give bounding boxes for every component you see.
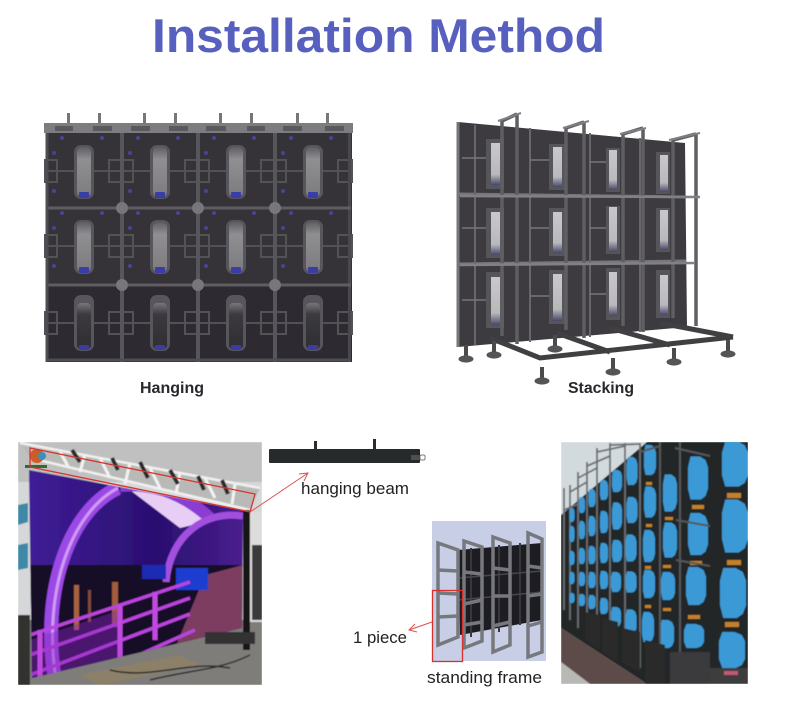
panel: hanging LED cabinet wall (44, 113, 353, 362)
panel: stacking LED wall with frames (458, 113, 736, 385)
arrow: 1 piece callout (409, 622, 432, 632)
label: 1 piece: 1 piece (353, 628, 407, 647)
label: stacking: Stacking (568, 380, 634, 397)
highlight: red outline around hanging beam (30, 448, 255, 512)
photo: hanging LED screen on truss (18, 442, 262, 690)
highlight: red box around 1 piece (432, 590, 462, 662)
icon: logo on photo (25, 449, 47, 468)
label: standing frame: standing frame (427, 668, 542, 687)
photo: stacked cabinets with blue backs (561, 442, 748, 684)
icon: hanging beam (269, 439, 425, 463)
photo: standing frame (432, 521, 546, 661)
label: hanging: Hanging (140, 380, 204, 397)
label: hanging beam: hanging beam (301, 479, 409, 498)
arrow: beam callout (250, 473, 308, 512)
title: Installation Method (152, 9, 605, 62)
